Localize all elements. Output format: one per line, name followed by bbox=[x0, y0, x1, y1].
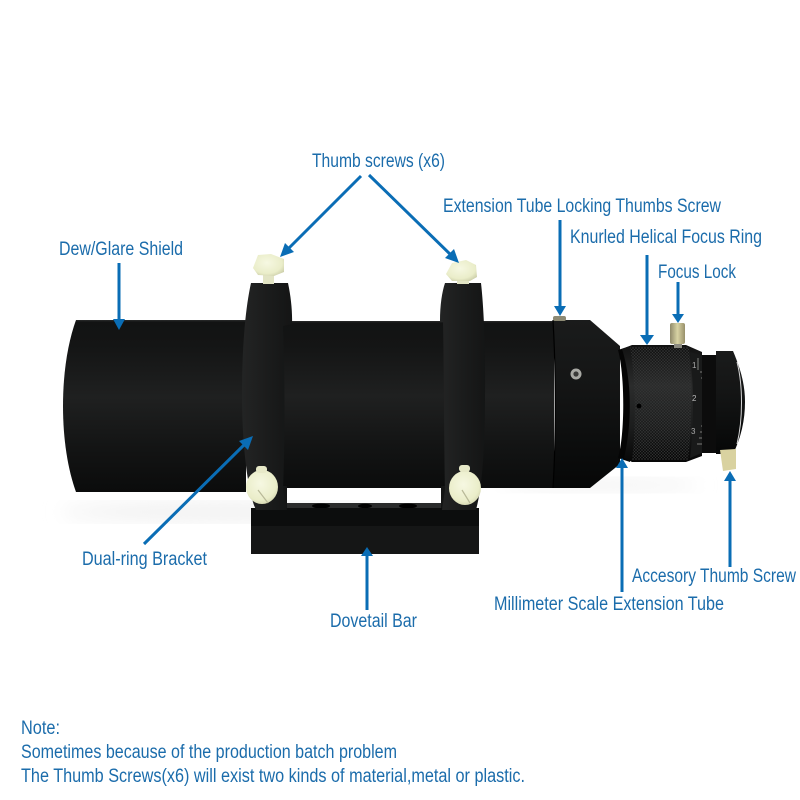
arrow: accessory screw bbox=[724, 471, 736, 567]
arrow: dew shield bbox=[113, 263, 125, 330]
arrow: thumb screw right bbox=[369, 175, 459, 263]
label: extension tube screw: Extension Tube Locking Thumbs Screw bbox=[443, 196, 721, 217]
tube screw bbox=[553, 316, 566, 321]
arrow: dual-ring bracket bbox=[144, 436, 253, 544]
arrow: knurled ring bbox=[640, 255, 654, 345]
rear tube bbox=[480, 321, 554, 488]
label: dual-ring bracket: Dual-ring Bracket bbox=[82, 549, 208, 570]
bracket plate bbox=[280, 486, 448, 512]
label: knurled ring: Knurled Helical Focus Ring bbox=[570, 227, 762, 248]
scale ring: 1 bbox=[692, 361, 697, 370]
scale ring: 2 bbox=[692, 394, 697, 403]
label: dew shield: Dew/Glare Shield bbox=[59, 239, 183, 260]
note text block: Sometimes because of the production batch problem bbox=[21, 742, 397, 763]
main tube bbox=[280, 321, 450, 488]
arrow: dovetail bar bbox=[361, 547, 373, 610]
guide scope photo bbox=[60, 254, 745, 554]
scale ring bbox=[690, 352, 708, 458]
brass focus lock screw bbox=[674, 342, 682, 348]
dovetail bar bbox=[251, 508, 479, 554]
focus collar bbox=[618, 346, 630, 462]
accessory screw bbox=[720, 449, 736, 471]
dew shield bbox=[63, 320, 246, 492]
scale ring: 3 bbox=[691, 427, 696, 436]
arrow: millimeter scale bbox=[616, 458, 628, 592]
label: focus lock: Focus Lock bbox=[658, 262, 736, 283]
label: millimeter scale: Millimeter Scale Extension Tube bbox=[494, 594, 724, 615]
knurled ring bbox=[630, 347, 691, 460]
label: dovetail bar: Dovetail Bar bbox=[330, 611, 418, 632]
nylon screws bbox=[246, 254, 481, 505]
arrows bbox=[113, 175, 736, 610]
label: thumb screws: Thumb screws (x6) bbox=[312, 151, 445, 172]
note text block: Note: bbox=[21, 718, 60, 739]
rear barrel bbox=[702, 355, 720, 453]
arrow: focus lock bbox=[672, 282, 684, 323]
ring one bbox=[242, 283, 292, 510]
arrow: extension tube screw bbox=[554, 220, 566, 316]
locking section and cone bbox=[553, 320, 620, 488]
note text block: The Thumb Screws(x6) will exist two kinds of material,metal or plastic. bbox=[21, 766, 525, 787]
note text block bbox=[21, 718, 525, 787]
arrow: thumb screw left bbox=[280, 176, 361, 257]
ring two bbox=[440, 283, 485, 510]
small grub screw bbox=[570, 368, 582, 380]
